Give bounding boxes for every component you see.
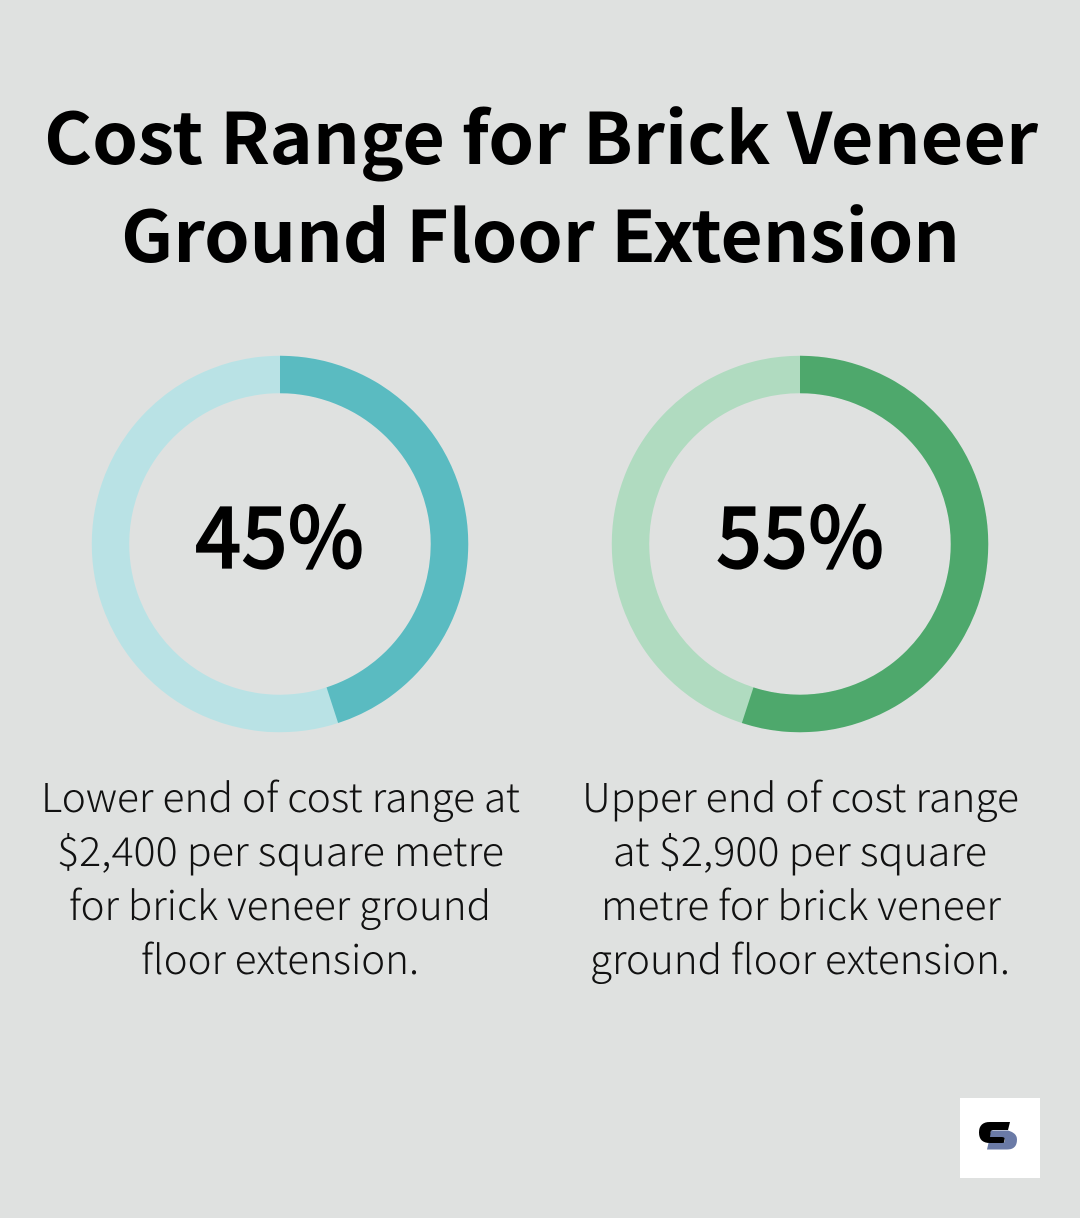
- panel: lower end 45%: [41, 374, 520, 986]
- donut chart: 45%: [110, 374, 450, 714]
- description: upper end: at $2,900 per square: [613, 820, 987, 878]
- title: Cost Range for Brick Veneer: [44, 83, 1039, 185]
- description: lower end: Lower end of cost range at: [41, 766, 520, 824]
- title: Ground Floor Extension: [121, 181, 960, 283]
- description: upper end: Upper end of cost range: [582, 766, 1019, 824]
- percentage: 55%: 55%: [716, 470, 884, 593]
- description: upper end: metre for brick veneer: [601, 874, 1002, 932]
- description: lower end: for brick veneer ground: [69, 874, 491, 932]
- description: lower end: [41, 766, 520, 986]
- description: upper end: ground floor extension.: [590, 928, 1010, 986]
- panel: upper end 55%: [582, 374, 1019, 986]
- description: upper end: [582, 766, 1019, 986]
- donut chart: 55%: [630, 374, 970, 714]
- title: [44, 83, 1039, 283]
- percentage: 45%: 45%: [195, 470, 364, 593]
- description: lower end: floor extension.: [141, 928, 419, 986]
- description: lower end: $2,400 per square metre: [57, 820, 504, 878]
- icon: logo mark: [979, 1122, 1017, 1150]
- logo badge: [960, 1098, 1040, 1178]
